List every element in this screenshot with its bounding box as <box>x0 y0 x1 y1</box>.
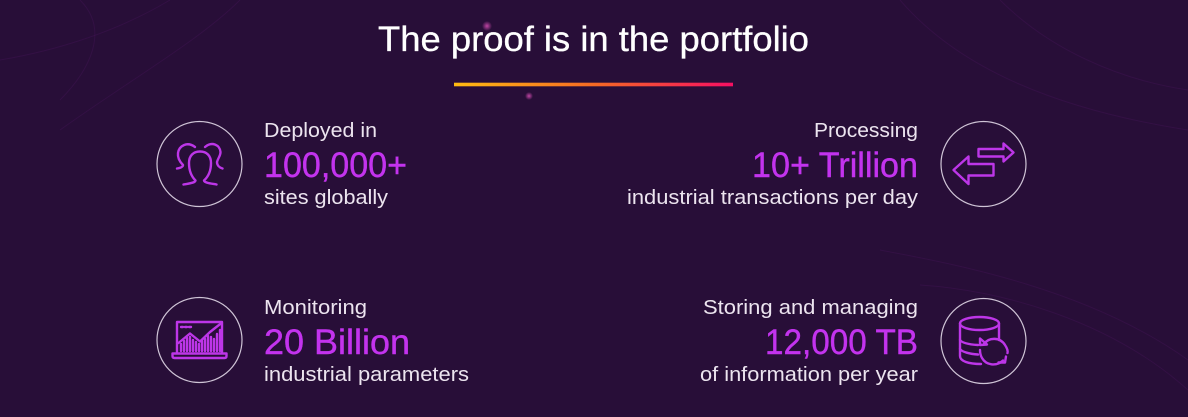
stat: storage <box>700 297 1026 386</box>
icon: opposing arrows <box>941 122 1026 206</box>
stat: transactions <box>627 120 1026 209</box>
title gradient rule <box>454 83 733 86</box>
stat: parameters <box>157 297 469 386</box>
icon: database sync <box>941 298 1026 384</box>
text: storing and managing: Storing and managing <box>703 297 918 319</box>
text: industrial parameters: industrial parameters <box>264 364 469 386</box>
stat: deployed sites <box>157 120 407 209</box>
title: The proof is in the portfolio <box>378 20 809 59</box>
icon: laptop chart <box>157 298 242 382</box>
text: transactions per day: industrial transactions per day <box>627 187 918 209</box>
text: sites globally: sites globally <box>264 187 388 209</box>
text: monitoring: Monitoring <box>264 297 367 319</box>
text: processing: Processing <box>814 120 918 142</box>
number: 12,000 TB: 12,000 TB <box>765 323 918 362</box>
number: 10+ Trillion: 10+ Trillion <box>752 146 918 185</box>
icon: people <box>157 122 242 206</box>
number: 100,000+: 100,000+ <box>264 146 407 185</box>
text: information per year: of information per year <box>700 364 918 386</box>
number: 20 Billion: 20 Billion <box>264 323 410 362</box>
text: deployed in: Deployed in <box>264 120 377 142</box>
